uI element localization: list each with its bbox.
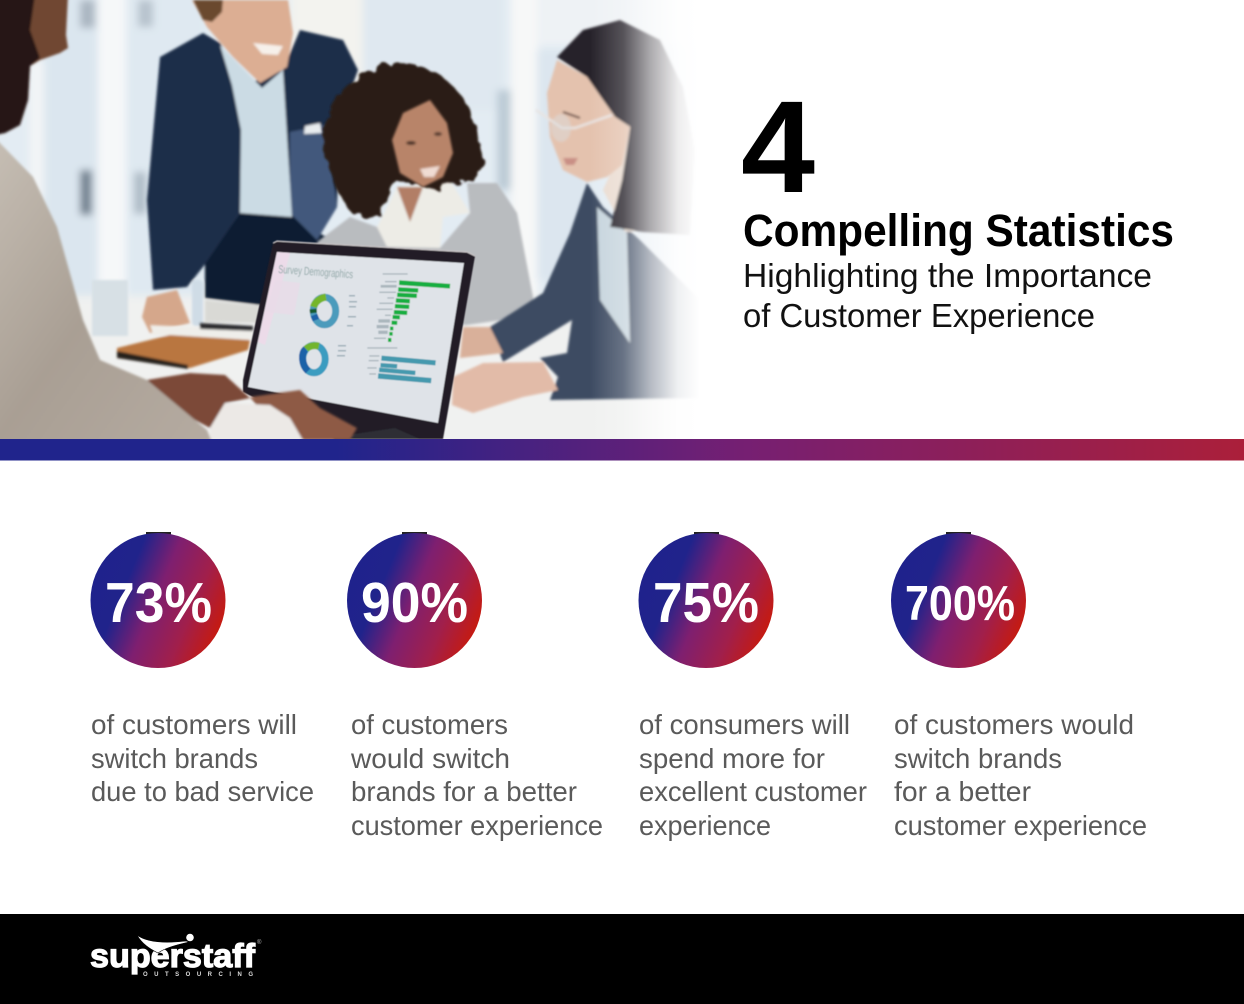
description: of customers — [351, 709, 508, 740]
curly hair — [323, 63, 481, 217]
jacket and blouse — [317, 180, 535, 325]
badge: 90% — [361, 571, 468, 635]
description: excellent customer — [639, 776, 867, 807]
badge: 700% — [905, 577, 1015, 631]
standing man — [142, 0, 358, 333]
stat 1: 73% — [90, 532, 314, 807]
heading: Compelling Statistics — [743, 205, 1174, 256]
description: experience — [639, 810, 771, 841]
white fade toward the title — [590, 0, 700, 445]
badge — [638, 532, 774, 668]
donut charts — [302, 297, 336, 373]
registered mark: ® — [257, 939, 262, 946]
cuff — [210, 403, 304, 442]
description: switch brands — [894, 743, 1062, 774]
stat 3: 75% — [638, 532, 867, 841]
description — [350, 709, 603, 841]
seated woman in the centre — [317, 63, 535, 325]
description: switch brands — [91, 743, 258, 774]
logo: superstaff outsourcing — [90, 934, 262, 978]
description: of customers would — [894, 709, 1134, 740]
tagline: OUTSOURCING — [143, 972, 253, 978]
logo swoosh and figure — [137, 935, 189, 953]
laptop screen — [248, 252, 464, 423]
photo: team reviewing survey data on a laptop — [0, 0, 690, 439]
description: for a better — [894, 776, 1031, 807]
description: customer experience — [351, 810, 603, 841]
description: spend more for — [639, 743, 825, 774]
description — [91, 709, 314, 807]
table items: notebook, tablet and glass — [92, 280, 253, 369]
description: due to bad service — [91, 776, 314, 807]
description: customer experience — [894, 810, 1147, 841]
description — [639, 709, 867, 841]
stat 2: 90% — [347, 532, 603, 841]
description: of consumers will — [639, 709, 850, 740]
gradient divider band — [0, 439, 1244, 460]
office window background — [0, 0, 658, 439]
badge: 75% — [653, 571, 759, 635]
face — [392, 100, 453, 187]
description: of customers will — [91, 709, 297, 740]
title block: of Customer Experience — [743, 297, 1095, 334]
wordmark: superstaff — [90, 937, 256, 974]
keyboard hand — [147, 373, 250, 428]
head and beard — [28, 0, 70, 96]
description — [894, 709, 1147, 841]
badge — [891, 532, 1026, 668]
subheading: Highlighting the Importance — [743, 257, 1152, 294]
badge: 73% — [105, 571, 212, 635]
foreground man: head, jacket and hands — [0, 0, 357, 442]
badge — [347, 532, 482, 668]
description: would switch — [350, 743, 510, 774]
title block — [741, 73, 1174, 334]
chart labels — [367, 273, 408, 375]
blue bar chart — [378, 356, 436, 383]
badge — [90, 532, 226, 668]
green bar chart — [388, 280, 450, 342]
laptop screen: Survey Demographics — [278, 264, 354, 281]
footer band — [0, 914, 1244, 1004]
stat 4: 700% — [891, 532, 1147, 841]
laptop with survey dashboard — [243, 241, 475, 439]
numeral 4: 4 — [741, 73, 815, 220]
beige jacket — [0, 138, 212, 442]
description: brands for a better — [351, 776, 577, 807]
donut legends — [337, 295, 357, 356]
woman on the right with glasses — [452, 20, 700, 413]
